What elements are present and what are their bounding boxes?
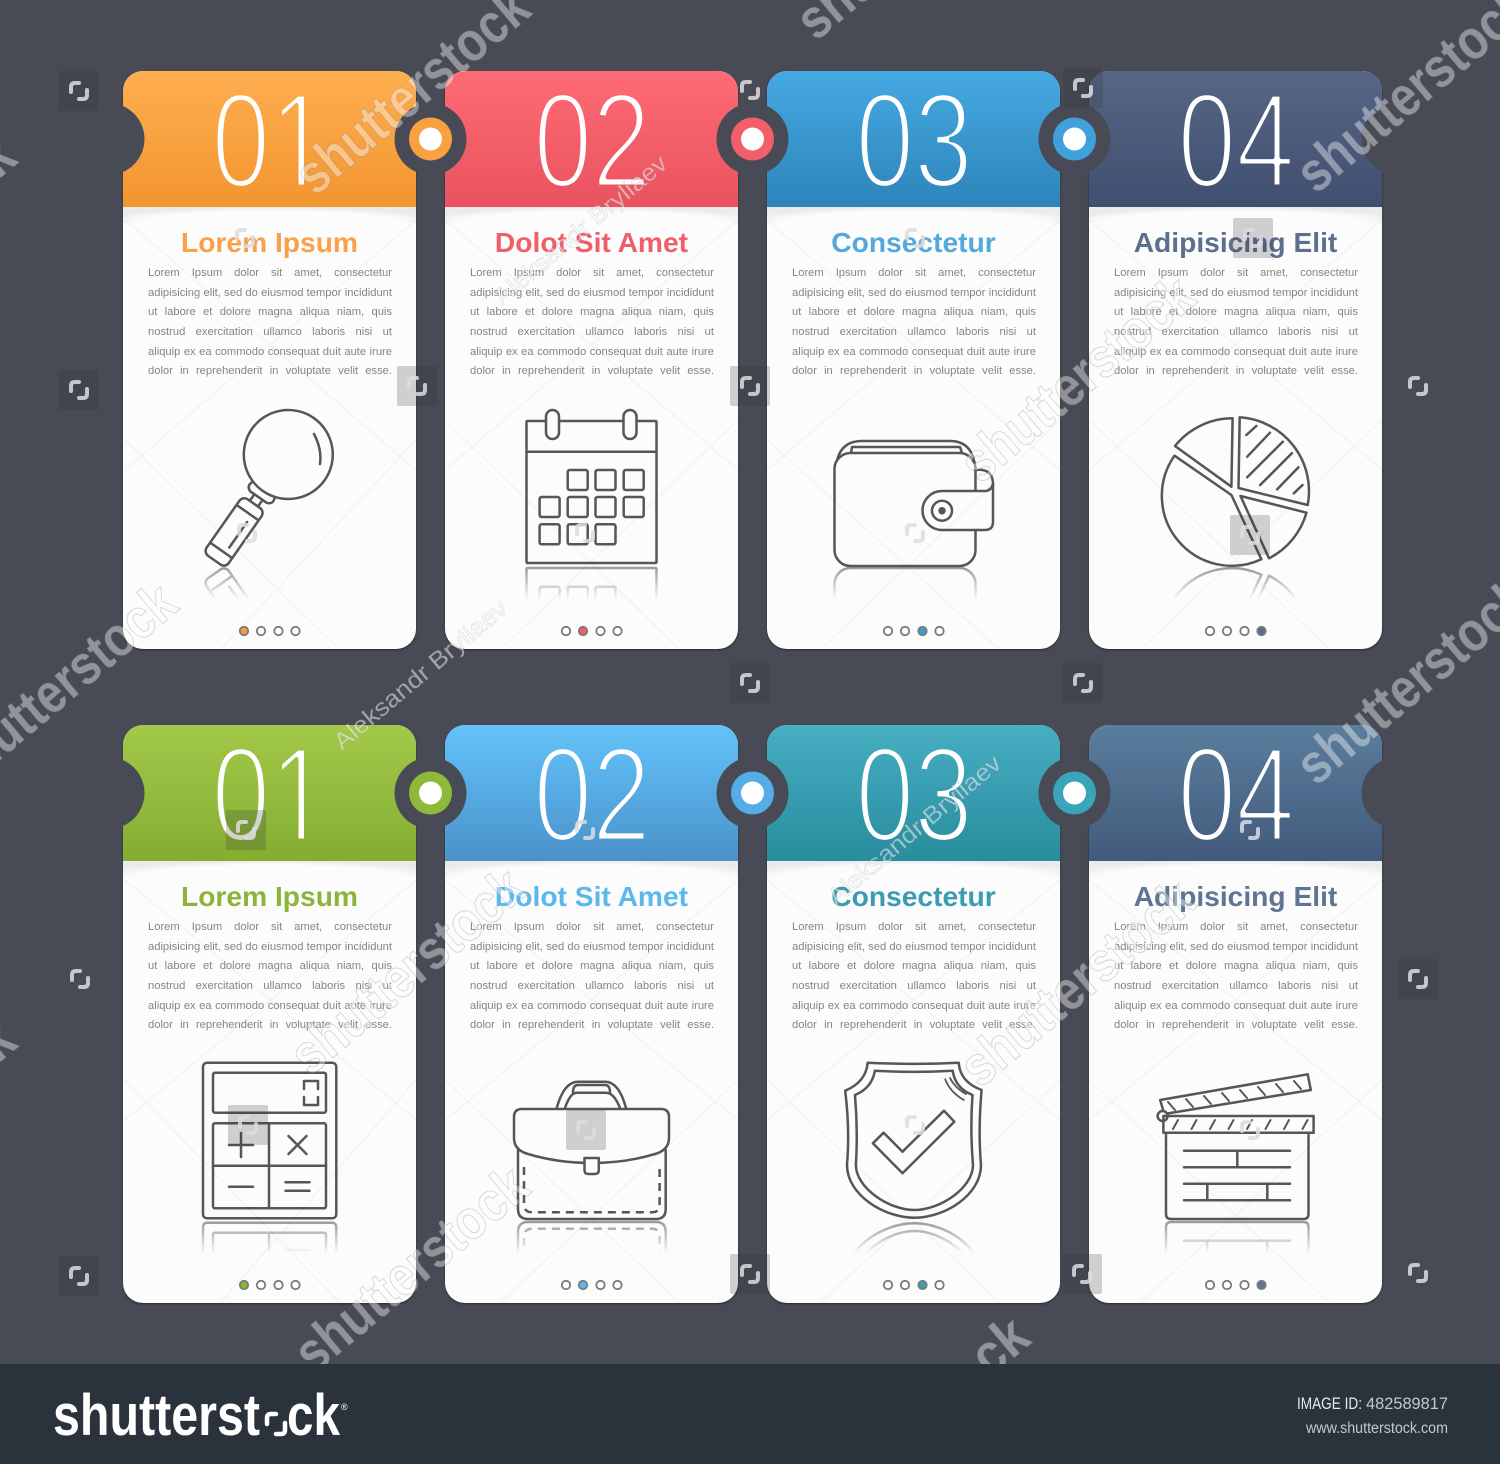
footer text: image id: IMAGE ID: [1297, 1394, 1362, 1413]
panel: card 03 Consectetur (top row) [767, 71, 1060, 649]
body text: Lorem Ipsum dolor sit amet, consectetur [148, 921, 392, 933]
panel: card 02 Dolot Sit Amet (bottom row) [445, 725, 738, 1303]
pagination dots [1204, 626, 1267, 636]
body text: ut labore et dolore magna aliqua niam, quis [148, 960, 392, 972]
heading: Adipisicing Elit: Adipisicing Elit [1134, 880, 1337, 912]
panel: card 04 Adipisicing Elit (top row) [1089, 71, 1382, 649]
pagination dots [882, 626, 945, 636]
icon: film clapperboard [1156, 1073, 1315, 1252]
footer bar [0, 1364, 1500, 1464]
heading: Consectetur: Consectetur [831, 226, 996, 258]
heading: Dolot Sit Amet: Dolot Sit Amet [495, 880, 688, 912]
header band with number 03 [767, 71, 1060, 207]
watermark: author credit: Aleksandr Bryliaev [823, 750, 1007, 911]
body text: dolor in reprehenderit in voluptate velit esse. [1114, 365, 1358, 377]
icon: wallet [833, 440, 994, 598]
body text [470, 267, 714, 377]
panel: card 04 Adipisicing Elit (bottom row) [1089, 725, 1382, 1303]
body text: adipisicing elit, sed do eiusmod tempor incididunt [1114, 941, 1358, 953]
connector node: teal [1038, 757, 1110, 829]
body text: ut labore et dolore magna aliqua niam, quis [148, 306, 392, 318]
body text [148, 267, 392, 377]
connector node: red [716, 103, 788, 175]
header band with number 01 [123, 725, 416, 861]
icon: calculator [202, 1062, 338, 1252]
body text: aliquip ex ea commodo consequat duit aute irure [1114, 1000, 1358, 1012]
body text: dolor in reprehenderit in voluptate velit esse. [148, 365, 392, 377]
panel: card 01 Lorem Ipsum (bottom row) [123, 725, 416, 1303]
pagination dots [238, 1280, 301, 1290]
body text [792, 267, 1036, 377]
footer text: image id [1297, 1394, 1448, 1413]
body text: aliquip ex ea commodo consequat duit aute irure [470, 346, 714, 358]
body text: Lorem Ipsum dolor sit amet, consectetur [792, 267, 1036, 279]
heading: Adipisicing Elit: Adipisicing Elit [1134, 226, 1337, 258]
body text [1114, 267, 1358, 377]
pagination dots [560, 1280, 623, 1290]
body text: nostrud exercitation ullamco laboris nisi ut [148, 326, 392, 338]
body text: aliquip ex ea commodo consequat duit aute irure [792, 346, 1036, 358]
watermark: author credit [329, 150, 1007, 911]
footer text: website: www.shutterstock.com [1305, 1420, 1448, 1437]
heading: Dolot Sit Amet: Dolot Sit Amet [495, 226, 688, 258]
body text [1114, 921, 1358, 1031]
icon: shield with check mark [844, 1062, 983, 1252]
footer logo: shutterstock wordmark: ® [341, 1402, 348, 1412]
header band with number 01 [123, 71, 416, 207]
body text: nostrud exercitation ullamco laboris nisi ut [470, 980, 714, 992]
right notch bottom row [1362, 757, 1434, 829]
left notch bottom row [72, 757, 144, 829]
footer text: image id: 482589817 [1366, 1394, 1448, 1413]
body text: Lorem Ipsum dolor sit amet, consectetur [148, 267, 392, 279]
footer logo: shutterstock wordmark: ck [287, 1383, 341, 1448]
body text: aliquip ex ea commodo consequat duit aute irure [148, 346, 392, 358]
body text: ut labore et dolore magna aliqua niam, quis [1114, 306, 1358, 318]
body text [470, 921, 714, 1031]
body text: ut labore et dolore magna aliqua niam, quis [470, 306, 714, 318]
header band with number 04 [1089, 71, 1382, 207]
body text: dolor in reprehenderit in voluptate velit esse. [148, 1019, 392, 1031]
body text: dolor in reprehenderit in voluptate velit esse. [792, 365, 1036, 377]
watermark: author credit: Aleksandr Bryliaev [489, 150, 673, 311]
watermark: shutterstock wordmarks: shutterstock [947, 866, 1207, 1098]
body text: nostrud exercitation ullamco laboris nisi ut [148, 980, 392, 992]
icon: pie chart [1160, 416, 1310, 598]
body text: adipisicing elit, sed do eiusmod tempor incididunt [792, 941, 1036, 953]
body text: adipisicing elit, sed do eiusmod tempor incididunt [792, 287, 1036, 299]
left notch top row [72, 103, 144, 175]
pagination dots [238, 626, 301, 636]
right notch top row [1362, 103, 1434, 175]
body text: ut labore et dolore magna aliqua niam, quis [1114, 960, 1358, 972]
footer logo: shutterstock wordmark: shutterst [53, 1383, 260, 1448]
body text: aliquip ex ea commodo consequat duit aute irure [792, 1000, 1036, 1012]
header band with number 02 [445, 725, 738, 861]
body text: ut labore et dolore magna aliqua niam, quis [792, 960, 1036, 972]
body text: Lorem Ipsum dolor sit amet, consectetur [792, 921, 1036, 933]
body text: aliquip ex ea commodo consequat duit aute irure [470, 1000, 714, 1012]
header band with number 02 [445, 71, 738, 207]
connector node: green [394, 757, 466, 829]
body text: dolor in reprehenderit in voluptate velit esse. [470, 1019, 714, 1031]
watermark: shutterstock wordmarks: shutterstock [947, 262, 1207, 494]
body text: nostrud exercitation ullamco laboris nisi ut [792, 326, 1036, 338]
body text: Lorem Ipsum dolor sit amet, consectetur [1114, 921, 1358, 933]
connector node: light blue [716, 757, 788, 829]
icon: calendar [525, 408, 658, 598]
panel: card 01 Lorem Ipsum (top row) [123, 71, 416, 649]
body text: nostrud exercitation ullamco laboris nisi ut [1114, 980, 1358, 992]
body text: nostrud exercitation ullamco laboris nisi ut [470, 326, 714, 338]
header band with number 04 [1089, 725, 1382, 861]
body text: adipisicing elit, sed do eiusmod tempor incididunt [470, 941, 714, 953]
watermark: shutterstock wordmarks: ck [957, 1302, 1041, 1387]
body text: nostrud exercitation ullamco laboris nisi ut [1114, 326, 1358, 338]
body text [148, 921, 392, 1031]
icon: magnifying glass [204, 408, 334, 598]
body text: Lorem Ipsum dolor sit amet, consectetur [1114, 267, 1358, 279]
heading: Lorem Ipsum: Lorem Ipsum [181, 226, 358, 258]
pagination dots [882, 1280, 945, 1290]
body text: dolor in reprehenderit in voluptate velit esse. [1114, 1019, 1358, 1031]
connector node: orange [394, 103, 466, 175]
body text: ut labore et dolore magna aliqua niam, quis [792, 306, 1036, 318]
body text: aliquip ex ea commodo consequat duit aute irure [148, 1000, 392, 1012]
pagination dots [1204, 1280, 1267, 1290]
body text: Lorem Ipsum dolor sit amet, consectetur [470, 267, 714, 279]
icon: briefcase [512, 1080, 670, 1252]
watermark: grey squares [59, 68, 1438, 1296]
body text: aliquip ex ea commodo consequat duit aute irure [1114, 346, 1358, 358]
body text: dolor in reprehenderit in voluptate velit esse. [470, 365, 714, 377]
connector node: blue [1038, 103, 1110, 175]
pagination dots [560, 626, 623, 636]
watermark: author credit: Aleksandr Bryliaev [329, 595, 513, 756]
body text: adipisicing elit, sed do eiusmod tempor incididunt [470, 287, 714, 299]
body text: ut labore et dolore magna aliqua niam, quis [470, 960, 714, 972]
watermark: corner marks [71, 80, 1426, 1284]
body text [792, 921, 1036, 1031]
watermark: faint cross lines on cards [125, 220, 1382, 1303]
header band with number 03 [767, 725, 1060, 861]
body text: adipisicing elit, sed do eiusmod tempor incididunt [1114, 287, 1358, 299]
body text: Lorem Ipsum dolor sit amet, consectetur [470, 921, 714, 933]
body text: adipisicing elit, sed do eiusmod tempor incididunt [148, 287, 392, 299]
body text: adipisicing elit, sed do eiusmod tempor incididunt [148, 941, 392, 953]
panel: card 03 Consectetur (bottom row) [767, 725, 1060, 1303]
watermark: shutterstock wordmarks: shutterstock [281, 1152, 541, 1384]
body text: dolor in reprehenderit in voluptate velit esse. [792, 1019, 1036, 1031]
heading: Lorem Ipsum: Lorem Ipsum [181, 880, 358, 912]
heading: Consectetur: Consectetur [831, 880, 996, 912]
watermark: shutterstock wordmarks: shutterstock [277, 854, 537, 1086]
panel: card 02 Dolot Sit Amet (top row) [445, 71, 738, 649]
body text: nostrud exercitation ullamco laboris nisi ut [792, 980, 1036, 992]
